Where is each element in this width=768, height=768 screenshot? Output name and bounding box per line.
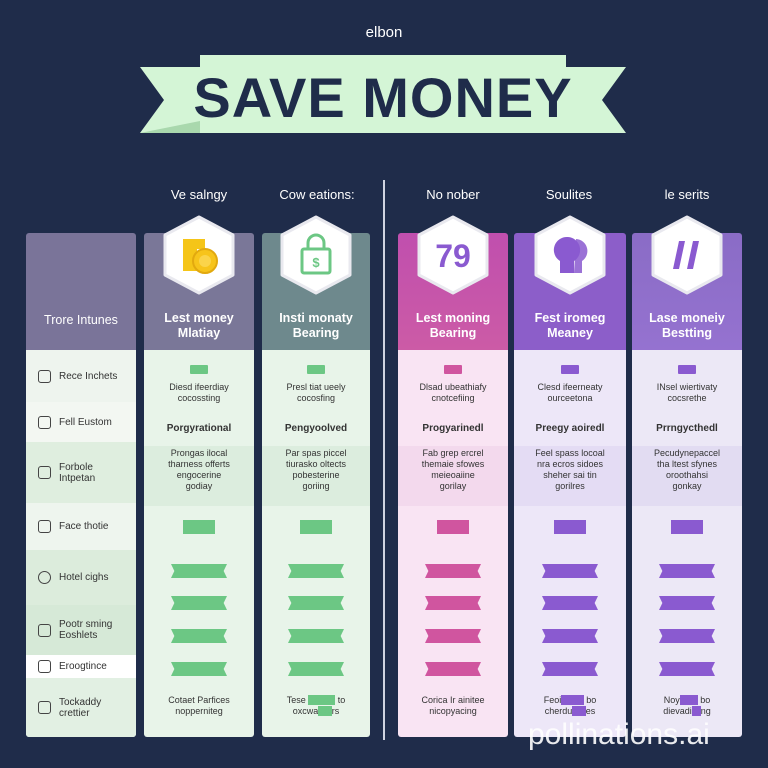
icon: slashes bbox=[652, 216, 722, 294]
icon: lock with dollar bbox=[280, 216, 352, 294]
panel: labels column: Rece Inchets bbox=[59, 370, 117, 382]
panel: labels column: Fell Eustom bbox=[59, 416, 112, 428]
panel: column 4 purple: sheher sai tin bbox=[543, 470, 597, 480]
panel: column 5 purple: Prrngycthedl bbox=[656, 423, 718, 434]
icon: heads bbox=[534, 216, 606, 294]
panel: column 5 purple bbox=[632, 233, 742, 737]
panel: column 3 pink: meieoaiine bbox=[431, 470, 475, 480]
panel: column 2 green: Par spas piccel bbox=[285, 448, 347, 458]
panel: labels column: Intpetan bbox=[59, 472, 95, 484]
panel: labels column: Hotel cighs bbox=[59, 572, 108, 583]
panel: column 4 purple: Clesd ifeerneaty bbox=[537, 382, 603, 392]
panel: column 1 green: nopperniteg bbox=[175, 706, 223, 716]
panel: column 3 pink bbox=[398, 233, 508, 737]
panel: labels column: Eroogtince bbox=[59, 661, 107, 672]
panel: column 5 purple: cocsrethe bbox=[667, 393, 707, 403]
panel: column 2 green: goriing bbox=[302, 481, 330, 491]
column captions: le serits bbox=[665, 187, 709, 202]
divider bbox=[383, 180, 385, 740]
panel: column 5 purple: dievadixxng bbox=[663, 706, 711, 716]
panel: column 4 purple: Feoixxxxx bo bbox=[544, 695, 596, 705]
panel: column 4 purple: Fest iromeg bbox=[535, 311, 605, 325]
panel: column 4 purple: Feel spass locoal bbox=[535, 448, 605, 458]
panel: column 3 pink: Dlsad ubeathiafy bbox=[419, 382, 487, 392]
panel: column 3 pink: gorilay bbox=[440, 481, 466, 491]
panel: column 5 purple: tha ltest sfynes bbox=[657, 459, 717, 469]
title: SAVE MONEY bbox=[193, 66, 573, 129]
panel: column 5 purple: Lase moneiy bbox=[649, 311, 725, 325]
panel: labels column: crettier bbox=[59, 708, 90, 718]
panel: column 3 pink: cnotcefiing bbox=[431, 393, 475, 403]
panel: column 2 green: Pengyoolved bbox=[285, 423, 347, 434]
panel: column 1 green: Prongas ilocal bbox=[171, 448, 227, 458]
panel: column 2 green: oxcwaxxxrs bbox=[293, 706, 339, 716]
panel: column 2 green: Insti monaty bbox=[279, 311, 353, 325]
panel: column 1 green bbox=[144, 233, 254, 737]
watermark: pollinations.ai bbox=[528, 718, 710, 751]
panel: column 4 purple: cherduxxxes bbox=[545, 706, 595, 716]
panel: column 4 purple: Meaney bbox=[547, 326, 593, 340]
panel: column 3 pink: Corica Ir ainitee bbox=[421, 695, 485, 705]
brand text: elbon bbox=[366, 24, 402, 41]
panel: labels column: Trore Intunes bbox=[44, 313, 118, 327]
panel: column 2 green: pobesterine bbox=[292, 470, 340, 480]
panel: column 3 pink: nicopyacing bbox=[429, 706, 477, 716]
panel: column 4 purple: nra ecros sidoes bbox=[537, 459, 603, 469]
panel: column 1 green: Porgyrational bbox=[167, 423, 231, 434]
panel: column 4 purple bbox=[514, 233, 626, 737]
panel: column 1 green: Mlatiay bbox=[178, 326, 220, 340]
panel: column 2 green: cocosfing bbox=[297, 393, 335, 403]
column captions: No nober bbox=[426, 187, 480, 202]
column captions: Soulites bbox=[546, 187, 592, 202]
panel: column 3 pink: Fab grep ercrel bbox=[422, 448, 484, 458]
panel: column 4 purple: Preegy aoiredl bbox=[536, 423, 604, 434]
panel: column 5 purple: Noyxxxx bo bbox=[664, 695, 710, 705]
column captions bbox=[171, 187, 709, 202]
panel: labels column: Face thotie bbox=[59, 521, 108, 532]
panel: column 2 green: Bearing bbox=[293, 326, 339, 340]
panel: column 5 purple: Pecudynepaccel bbox=[654, 448, 720, 458]
panel: column 1 green: cocossting bbox=[178, 393, 220, 403]
panel: column 1 green: Lest money bbox=[164, 311, 234, 325]
panel: labels column: Tockaddy bbox=[59, 696, 101, 708]
panel: column 1 green: Cotaet Parfices bbox=[168, 695, 230, 705]
panel: labels column: Eoshlets bbox=[59, 630, 97, 641]
panel: labels column: Forbole bbox=[59, 462, 93, 472]
panel: column 2 green bbox=[262, 233, 370, 737]
panel: column 2 green: tiurasko oltects bbox=[286, 459, 346, 469]
panel: column 5 purple: oroothahsi bbox=[666, 470, 708, 480]
panel: labels column bbox=[26, 233, 136, 737]
panel: column 2 green: Presl tiat ueely bbox=[286, 382, 346, 392]
panel: column 3 pink: Progyarinedl bbox=[422, 423, 484, 434]
panel: column 1 green: tharness offerts bbox=[168, 459, 230, 469]
panel: column 3 pink: themaie sfowes bbox=[422, 459, 484, 469]
panel: column 1 green: engocerine bbox=[177, 470, 221, 480]
icon: number bbox=[418, 216, 488, 294]
panel: column 5 purple: gonkay bbox=[672, 481, 702, 491]
panel: column 2 green: Tese xxxxxx to bbox=[287, 695, 345, 705]
column captions: Cow eations: bbox=[279, 187, 355, 202]
column captions: Ve salngy bbox=[171, 187, 227, 202]
panel: column 1 green: godiay bbox=[186, 481, 212, 491]
icon: lock with dollar: $ bbox=[312, 255, 320, 270]
panel: column 3 pink: Bearing bbox=[430, 326, 476, 340]
panel: column 3 pink: Lest moning bbox=[416, 311, 490, 325]
panel: column 4 purple: gorilres bbox=[555, 481, 585, 491]
icon: number: 79 bbox=[435, 238, 471, 274]
panel: labels column: Pootr sming bbox=[59, 619, 112, 630]
panel: column 1 green: Diesd ifeerdiay bbox=[169, 382, 229, 392]
icon: coins bbox=[164, 216, 234, 294]
panel: column 5 purple: Bestting bbox=[662, 326, 712, 340]
panel: column 4 purple: ourceetona bbox=[547, 393, 593, 403]
panel: column 5 purple: INsel wiertivaty bbox=[657, 382, 717, 392]
title banner bbox=[140, 55, 626, 133]
